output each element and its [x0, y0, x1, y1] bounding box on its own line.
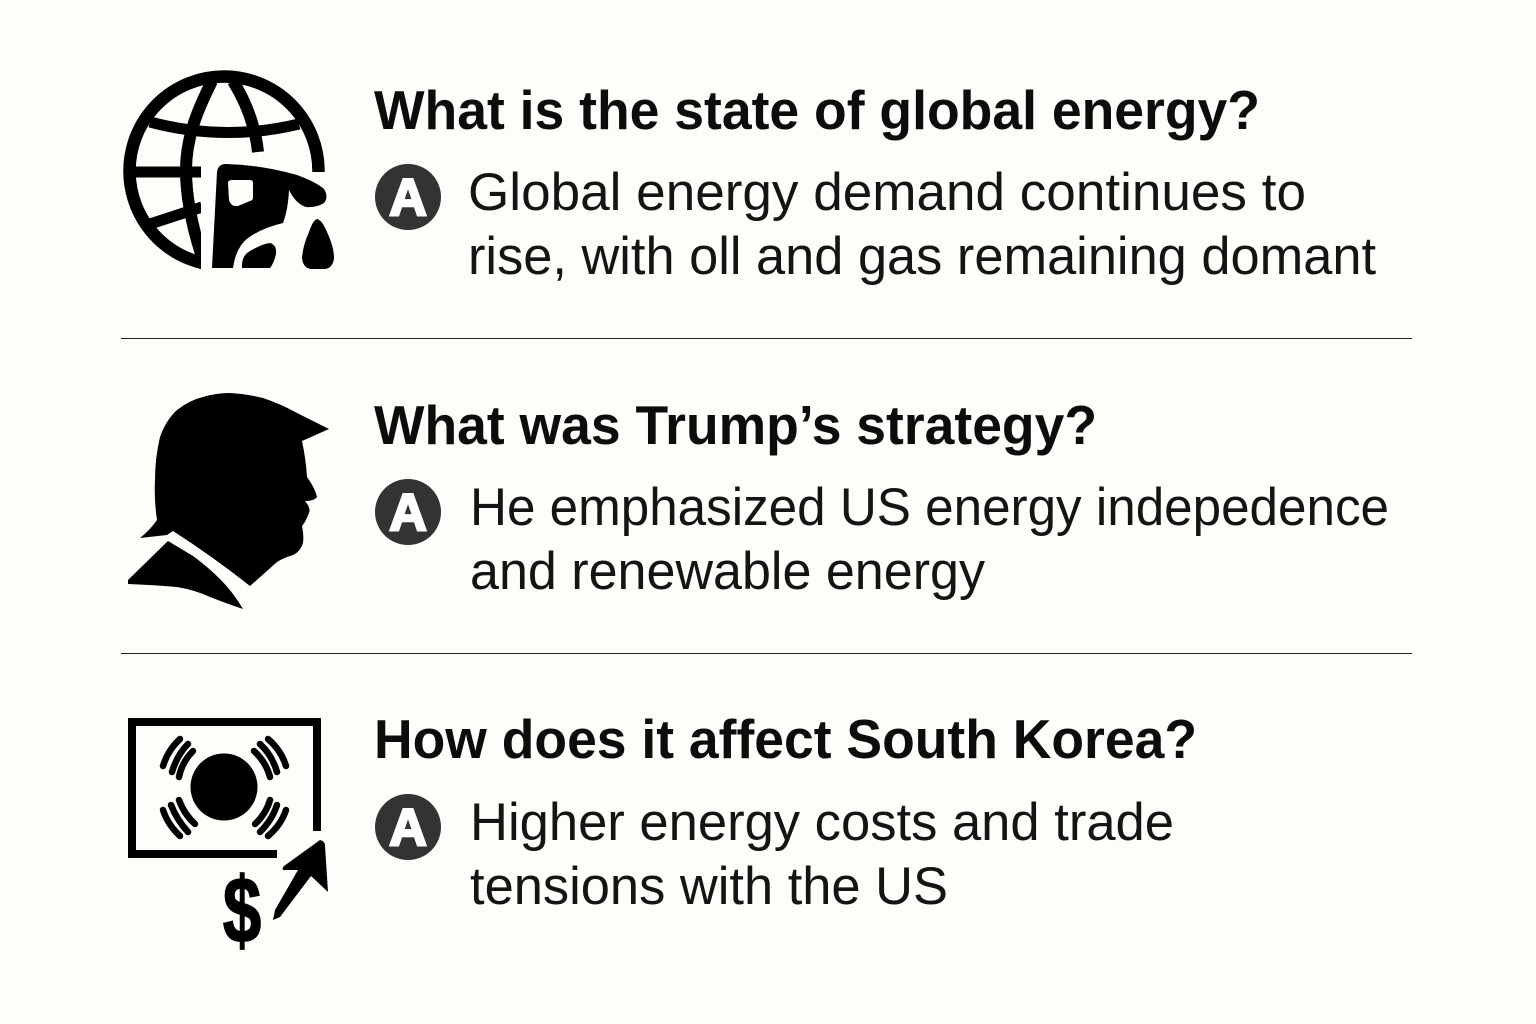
- badge: answer A: [375, 479, 441, 545]
- icon: Trump profile silhouette: [128, 393, 329, 609]
- answer text: Higher energy costs and trade: [470, 793, 1174, 852]
- icon: Korean flag with rising dollar: $: [223, 859, 261, 962]
- heading: Trump's strategy: What was Trump’s strategy?: [374, 394, 1097, 456]
- answer text: [470, 793, 1174, 916]
- answer text: [468, 163, 1376, 286]
- answer text: tensions with the US: [470, 857, 948, 916]
- panel: Trump's strategy: [128, 393, 1389, 609]
- panel: South Korea: [132, 708, 1197, 962]
- badge: answer A: [375, 164, 441, 230]
- answer text: and renewable energy: [470, 542, 985, 601]
- answer text: Global energy demand continues to: [468, 163, 1306, 222]
- answer text: rise, with oll and gas remaining domant: [468, 227, 1376, 286]
- infographic: [121, 70, 1412, 950]
- badge: answer A: [375, 794, 441, 860]
- icon: globe with fuel pump and oil drops: [130, 76, 334, 269]
- badge: answer A: A: [389, 799, 427, 857]
- panel: global energy: [130, 76, 1376, 286]
- badge: answer A: A: [389, 169, 427, 227]
- answer text: He emphasized US energy indepedence: [470, 478, 1389, 537]
- heading: South Korea: How does it affect South Korea?: [374, 708, 1197, 770]
- answer text: [470, 478, 1389, 601]
- icon: Korean flag with rising dollar: [132, 722, 328, 962]
- heading: state of global energy: What is the state of global energy?: [374, 79, 1260, 141]
- badge: answer A: A: [389, 484, 427, 542]
